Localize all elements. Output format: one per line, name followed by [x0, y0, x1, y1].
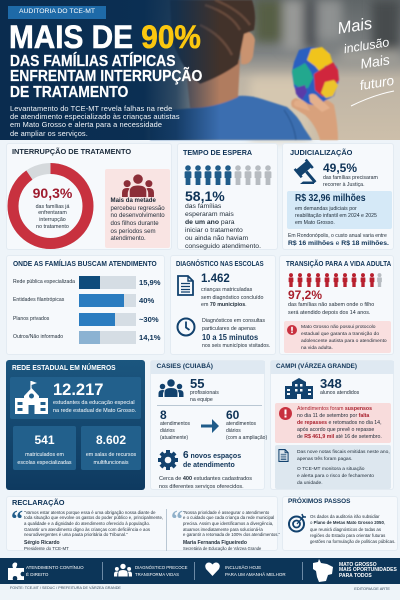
- Rondonópolis note: Em Rondonópolis, o custo anual varia entre: [288, 232, 387, 238]
- note text: apenas três foram pagas. O TCE-MT monitora a situação: [297, 457, 364, 472]
- bar: rede pública: Rede pública especializada: [13, 279, 75, 285]
- next steps text: que reunirá diagnósticos de todas as: [310, 527, 381, 532]
- icon: family: [114, 563, 132, 577]
- slogan 3: INCLUSÃO HOJE: [225, 564, 261, 570]
- quote 2: “Nossa prioridade é assegurar o atendimento: [183, 510, 269, 514]
- footer band: [0, 558, 400, 584]
- stat: 12.217: 12.217: [53, 381, 103, 399]
- panel: onde as famílias buscam atendimento: [6, 255, 165, 355]
- students note: Cerca de 400 estudantes cadastrados: [159, 476, 252, 482]
- donut label: [33, 185, 72, 230]
- consultation text: [202, 318, 265, 332]
- panel: reclamação: [6, 496, 278, 551]
- callout text: atendimento.: [110, 235, 146, 242]
- panel: diagnóstico nas escolas: [170, 255, 276, 355]
- alert text: Atendimentos foram suspensos: [297, 406, 372, 412]
- slogan 4: [339, 562, 397, 580]
- stat text: conseguido atendimento.: [185, 243, 261, 250]
- bar: entidades filantrópicas: 40%: [139, 296, 154, 304]
- amount note: em demandas judiciais por: [295, 206, 357, 212]
- comparison: today: [160, 408, 190, 441]
- handwritten slogan: [336, 15, 395, 106]
- intro text: em Mato Grosso e alerta para a necessidade: [10, 120, 162, 129]
- stat text: [190, 390, 219, 403]
- quote 2: e o cuidado que cada criança da rede municipal: [183, 515, 274, 520]
- subtitle: [10, 52, 202, 100]
- note: [226, 421, 267, 441]
- stat text: alunos atendidos: [320, 390, 359, 396]
- header: [151, 361, 265, 374]
- icon: clock: [176, 318, 196, 336]
- stat text: das famílias não sabem onde o filho: [288, 302, 374, 308]
- stat text: [288, 302, 374, 316]
- stat text: [323, 175, 378, 188]
- icon: family: [122, 174, 154, 197]
- panel: judicialização: [282, 143, 394, 250]
- alert text: de repasses e retomados no dia 14,: [297, 420, 382, 426]
- slogan 1: ATENDIMENTO CONTÍNUO: [26, 564, 84, 570]
- heading: RECLARAÇÃO: [12, 498, 65, 506]
- quote 2: precisa. Assim que identificamos a divergência,: [183, 521, 273, 526]
- intro text: [10, 104, 180, 138]
- note: (atualmente): [160, 435, 188, 441]
- header: CAMPI (VÁRZEA GRANDE): [276, 363, 357, 370]
- handwritten slogan: futuro: [359, 73, 395, 93]
- note: atendimentos: [226, 421, 256, 427]
- handwritten slogan: Mais: [359, 51, 391, 72]
- new spaces: [183, 450, 241, 469]
- stat text: [53, 400, 136, 414]
- icon: school: [15, 381, 48, 414]
- stat text: das famílias: [185, 203, 221, 210]
- donut label: 90,3%: [33, 185, 72, 201]
- panel: interrupção de tratamento: [6, 143, 172, 250]
- callout text: [110, 197, 165, 242]
- icon: puzzle piece: [8, 561, 26, 580]
- stat: 97,2%: 97,2%: [288, 288, 322, 302]
- icon: document: [278, 449, 289, 462]
- alert text: após acordo que prevê o repasse: [297, 427, 374, 433]
- slogan 3: [225, 564, 286, 578]
- callout text: no desenvolvimento: [110, 212, 165, 219]
- alert text: de R$ 461,9 mil até 16 de setembro.: [297, 434, 382, 440]
- arrow: [201, 419, 219, 433]
- stat box: 8.602: multifuncionais: [93, 460, 129, 466]
- quote 2: e garantir a retomada de 100% dos atendimentos.”: [183, 532, 280, 537]
- stat: 1.462: 1.462: [201, 273, 230, 285]
- note: (com a ampliação): [226, 435, 267, 441]
- icon: alert: [287, 325, 297, 335]
- stat: 348: 348: [320, 376, 342, 390]
- quote 1: neurodivergentes é uma pauta prioritária do Tribunal.”: [24, 532, 128, 537]
- note text: da unidade.: [297, 481, 323, 486]
- stat text: esperaram mais: [185, 211, 234, 218]
- tag: auditoria: [8, 6, 106, 18]
- stat text: crianças matriculadas: [201, 287, 252, 293]
- stat box: 8.602: 8.602: [96, 433, 126, 447]
- callout: 32,96 milhões: [287, 191, 392, 229]
- divider: [164, 509, 167, 551]
- icon: document: [177, 275, 194, 296]
- quote 1: “Vamos estar atentos porque essa é uma obrigação nossa diante de: [24, 510, 156, 514]
- note: diários: [160, 428, 175, 434]
- stat text: na rede estadual de Mato Grosso.: [53, 408, 136, 414]
- slogan 2: DIAGNÓSTICO PRECOCE: [135, 564, 188, 570]
- intro text: de ampliar os serviços.: [10, 129, 88, 138]
- consultation text: Diagnósticos em consultas: [202, 318, 265, 324]
- title: MAIS DE 90%: [9, 19, 201, 55]
- divider: [101, 562, 104, 580]
- callout text: Mais da metade: [110, 197, 156, 204]
- icon: target: [288, 513, 306, 533]
- next steps text: gestões na formulação de políticas públicas.: [310, 539, 395, 544]
- amount note: em Mato Grosso.: [295, 220, 335, 226]
- slogan 1: É DIREITO: [26, 572, 48, 576]
- note box: [275, 445, 391, 489]
- callout: regressão: [105, 169, 170, 248]
- stat text: profissionais: [190, 390, 219, 396]
- pictogram: 10 of 11: [288, 273, 382, 287]
- panel: rede estadual em números: [6, 360, 145, 490]
- new spaces: 6 novos espaços: [183, 450, 241, 460]
- stat box: 541: escolas especializadas: [17, 460, 72, 466]
- subtitle: DAS FAMÍLIAS ATÍPICAS: [10, 52, 176, 70]
- heading: INTERRUPÇÃO DE TRATAMENTO: [12, 147, 131, 156]
- stat text: ou ainda não haviam: [185, 235, 248, 242]
- donut label: no tratamento: [36, 224, 69, 230]
- note: atendimentos: [160, 421, 190, 427]
- next steps text: o Plano de Metas Mato Grosso 2050,: [310, 520, 385, 525]
- panel: tempo de espera: [177, 143, 278, 250]
- heading: ONDE AS FAMÍLIAS BUSCAM ATENDIMENTO: [12, 260, 156, 268]
- bar: outros: 14,1%: [139, 332, 161, 342]
- Rondonópolis values: R$ 16 milhões e R$ 18 milhões.: [288, 240, 389, 246]
- handwritten slogan: Mais: [336, 15, 373, 38]
- bar: rede pública: 15,9%: [139, 278, 161, 286]
- stat text: em 70 municípios.: [201, 302, 247, 308]
- heading: PRÓXIMOS PASSOS: [288, 498, 350, 504]
- quote 1: Garantir um atendimento digno às crianças com deficiência e aos: [24, 527, 150, 532]
- next steps text: Os dados da auditoria irão subsidiar: [310, 514, 380, 519]
- stat box: 8.602: em salas de recursos: [86, 452, 136, 458]
- note text: Das nove notas fiscais emitidas neste ano,: [297, 450, 390, 454]
- quote 2: [183, 510, 280, 538]
- author 1: Sérgio Ricardo: [24, 540, 60, 546]
- quote 2: atuamos imediatamente para solucioná-la: [183, 527, 263, 532]
- note: diários: [226, 428, 241, 434]
- next steps text: regiões do Estado para orientar futuras: [310, 533, 385, 538]
- author 2: [183, 540, 261, 552]
- callout text: os períodos sem: [110, 228, 156, 235]
- stat text: sem diagnóstico concluído: [201, 295, 263, 301]
- amount note: [295, 206, 377, 226]
- stat text: [201, 287, 264, 308]
- alert text: [301, 324, 387, 351]
- stat: 58,1%: 58,1%: [185, 188, 225, 204]
- slogan 4: MATO GROSSO: [339, 562, 377, 568]
- credit: EDITORIA DE ARTE: [354, 586, 390, 591]
- number: 60: 60: [226, 408, 239, 422]
- panel: Campi (Várzea Grande): [270, 360, 394, 490]
- quote 1: [24, 510, 163, 538]
- author 2: Maria Fernanda Figueiredo: [183, 540, 247, 546]
- alert text: estadual que garanta a transição do: [301, 332, 379, 337]
- stat: 49,5%: 49,5%: [323, 161, 357, 175]
- slogan 2: TRANSFORMA VIDAS: [135, 572, 179, 576]
- consultation text: particulares de apenas: [202, 326, 256, 332]
- donut label: interrupção: [39, 217, 66, 223]
- slogan 4: PARA TODOS: [339, 573, 372, 579]
- divider: [157, 404, 262, 407]
- header: CASIES (CUIABÁ): [156, 363, 213, 370]
- bar: rede pública: [13, 276, 161, 289]
- stat text: recorrer à Justiça.: [323, 182, 365, 188]
- panel: próximos passos: [282, 496, 398, 551]
- header: [271, 361, 394, 374]
- note text: [297, 448, 390, 487]
- divider: [301, 562, 304, 580]
- amount: R$ 32,96 milhões: [295, 193, 366, 204]
- bar: planos privados: Planos privados: [13, 316, 49, 322]
- donut chart: 90,3%: [8, 163, 94, 249]
- icon: gavel: [294, 158, 316, 184]
- subtitle: ENFRENTAM INTERRUPÇÃO: [10, 68, 202, 85]
- number: 8: 8: [160, 408, 167, 422]
- bar: entidades filantrópicas: [13, 294, 154, 307]
- callout text: percebeu regressão: [110, 205, 165, 212]
- alert box: [275, 403, 391, 443]
- panel: transição para a vida adulta: [279, 255, 394, 355]
- note: [160, 421, 190, 441]
- icon: heart: [205, 562, 220, 576]
- next steps text: [310, 514, 395, 546]
- heading: TRANSIÇÃO PARA A VIDA ADULTA: [286, 260, 391, 268]
- alert text: [297, 406, 382, 441]
- students note: [159, 476, 252, 490]
- slogan 3: PARA UM AMANHÃ MELHOR: [225, 572, 286, 576]
- quote mark 2: “: [171, 507, 183, 533]
- quote 1: toda situação que envolve os gastos do poder público e, principalmente,: [24, 515, 163, 520]
- author 1: [24, 540, 69, 552]
- subtitle: DE TRATAMENTO: [10, 84, 128, 100]
- icon: building: [285, 378, 313, 399]
- callout text: dos filhos durante: [110, 220, 159, 227]
- stat text: na equipe: [190, 397, 213, 403]
- heading: DIAGNÓSTICO NAS ESCOLAS: [176, 260, 264, 268]
- stat text: iniciar o tratamento: [185, 227, 243, 234]
- note text: e alerta para o risco de fechamento: [297, 474, 374, 479]
- heading: REDE ESTADUAL EM NÚMEROS: [12, 363, 115, 372]
- stat box: 541: [13, 426, 76, 470]
- alert text: na vida adulta.: [301, 346, 333, 351]
- panel: Casies (Cuiabá): [150, 360, 265, 490]
- stat text: de um ano para: [185, 219, 234, 226]
- bar: entidades filantrópicas: Entidades filantrópicas: [13, 297, 64, 303]
- consultation time: 10 a 15 minutos: [202, 332, 258, 342]
- pictogram: 5 of 9: [184, 165, 272, 185]
- bar: planos privados: [13, 313, 159, 326]
- bar: outros: [13, 331, 161, 344]
- icon: team: [158, 379, 184, 397]
- handwritten slogan: inclusão: [343, 35, 390, 56]
- stat text: será atendido depois dos 14 anos.: [288, 310, 370, 316]
- comparison: expansion: [226, 408, 267, 441]
- intro text: de atendimento especializado às crianças autistas: [10, 112, 180, 121]
- donut label: enfrentaram: [38, 210, 67, 216]
- author 1: Presidente do TCE-MT: [24, 546, 69, 550]
- alert text: adolescente autista para o atendimento: [301, 339, 387, 344]
- icon: Mato Grosso map: [313, 559, 333, 582]
- heading: JUDICIALIZAÇÃO: [290, 148, 352, 157]
- alert box: [284, 321, 391, 353]
- icon: alert: [278, 406, 292, 420]
- stat box: 8.602: [81, 426, 141, 470]
- stat text: [185, 203, 261, 250]
- students note: nos diferentes serviços oferecidos.: [159, 484, 244, 490]
- hero photo: child holding a puzzle heart: [0, 0, 400, 146]
- stat text: estudantes da educação especial: [53, 400, 135, 406]
- donut label: das famílias já: [36, 204, 69, 210]
- slogan 2: [135, 564, 188, 578]
- stat: 55: 55: [190, 376, 204, 390]
- source note: FONTE: TCE-MT / SEDUC / PREFEITURA DE VÁRZEA GRANDE: [10, 586, 121, 590]
- heading: TEMPO DE ESPERA: [183, 148, 252, 157]
- amount note: reabilitação infantil em 2024 e 2025: [295, 213, 377, 219]
- slogan 1: [26, 564, 84, 578]
- quote 1: a qualidade e a dignidade do atendimento oferecido à população.: [24, 521, 150, 526]
- alert text: no dia 11 de setembro por falta: [297, 413, 369, 419]
- author 2: Secretária de Educação de Várzea Grande: [183, 546, 261, 550]
- divider: [193, 562, 196, 580]
- slogan 4: MAIS OPORTUNIDADES: [339, 567, 397, 573]
- tag: auditoria: AUDITORIA DO TCE-MT: [19, 8, 95, 15]
- intro text: Levantamento do TCE-MT revela falhas na rede: [10, 104, 172, 112]
- stat box: 541: 541: [34, 433, 55, 447]
- icon: gear: [158, 450, 178, 470]
- quote mark 1: “: [11, 507, 23, 533]
- featured stat box: [10, 377, 141, 419]
- stat box: 541: matriculados em: [25, 452, 64, 458]
- new spaces: de atendimento: [183, 462, 235, 469]
- stat text: das famílias precisaram: [323, 175, 378, 181]
- bar: outros: Outros/Não informado: [13, 334, 63, 340]
- bar: planos privados: ~30%: [139, 314, 159, 324]
- alert text: Mato Grosso não possui protocolo: [301, 325, 376, 330]
- consultation note: nos seis municípios visitados.: [202, 342, 270, 348]
